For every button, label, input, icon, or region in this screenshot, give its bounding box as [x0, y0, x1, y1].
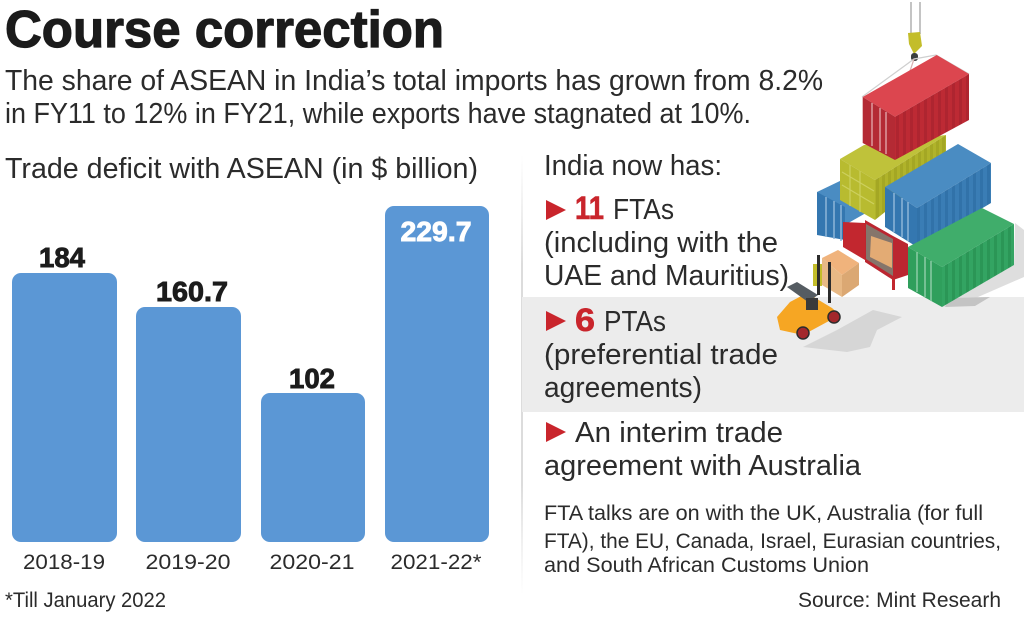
interim agreement item: An interim trade [575, 417, 783, 449]
subtitle [5, 65, 823, 130]
FTA talks note: FTA talks are on with the UK, Australia (for full [544, 502, 983, 525]
bar 2019-20 [136, 276, 241, 574]
PTAs item: 6 [575, 302, 595, 338]
yellow container [840, 135, 946, 220]
bar 2018-19: 184 [39, 242, 85, 273]
forklift [777, 255, 840, 339]
FTAs item: UAE and Mauritius) [544, 260, 789, 292]
bar 2019-20: 2019-20 [146, 551, 230, 574]
grey highlight band [522, 297, 1024, 412]
FTAs item: 11 [575, 190, 604, 226]
blue container right [885, 144, 991, 247]
bar 2020-21 [261, 363, 365, 574]
bar 2021-22: 229.7 [400, 216, 472, 247]
PTAs item: agreements) [544, 372, 702, 404]
bar chart: trade deficit [12, 206, 489, 574]
open red container [843, 220, 908, 290]
ground shadow [942, 223, 1024, 307]
FTAs item: FTAs [613, 194, 674, 226]
pallet of boxes [813, 250, 859, 297]
red container top [863, 55, 969, 160]
chart heading: Trade deficit with ASEAN (in $ billion) [5, 153, 478, 185]
PTAs item: (preferential trade [544, 339, 778, 371]
PTAs item [544, 302, 778, 404]
blue left container [817, 180, 880, 241]
bar 2021-22: 2021-22* [390, 551, 482, 574]
bar 2018-19: 2018-19 [23, 551, 105, 574]
interim agreement item [544, 417, 862, 482]
FTA talks note [544, 502, 1001, 577]
interim agreement item: agreement with Australia [544, 450, 862, 482]
panel heading: India now has: [544, 150, 722, 182]
FTA talks note: FTA), the EU, Canada, Israel, Eurasian countries, [544, 530, 1001, 553]
PTAs item: PTAs [604, 306, 666, 338]
bar 2020-21: 102 [289, 363, 335, 394]
FTAs item: (including with the [544, 227, 778, 259]
footnote: *Till January 2022 [5, 589, 166, 612]
FTAs item [544, 190, 789, 292]
crane hook [862, 2, 969, 116]
subtitle: The share of ASEAN in India’s total imports has grown from 8.2% [5, 65, 823, 97]
bar 2019-20: 160.7 [156, 276, 228, 307]
FTA talks note: and South African Customs Union [544, 554, 869, 577]
illustration: containers and forklift [777, 2, 1024, 352]
title: Course correction [5, 1, 444, 59]
bar 2018-19 [12, 242, 117, 574]
green container [908, 208, 1014, 307]
panel: India's trade agreements [544, 150, 1001, 577]
source: Source: Mint Researh [798, 589, 1001, 612]
bar 2020-21: 2020-21 [270, 551, 354, 574]
bar 2021-22 [385, 206, 489, 574]
subtitle: in FY11 to 12% in FY21, while exports have stagnated at 10%. [5, 98, 751, 130]
